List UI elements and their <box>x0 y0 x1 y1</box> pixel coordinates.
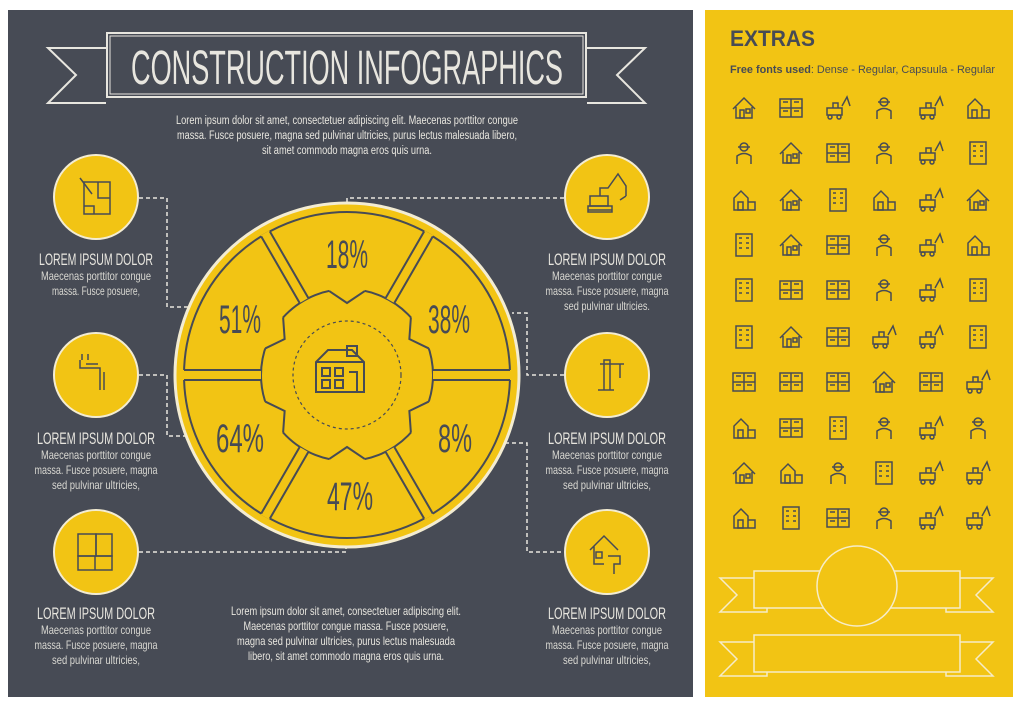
title banner <box>48 33 645 103</box>
labels: sed pulvinar ultricies, <box>52 653 140 667</box>
intro text: massa. Fusce posuere, magna sed pulvinar ultricies, purus lectus malesuada libero, <box>177 130 517 142</box>
bottom text: Maecenas porttitor congue massa. Fusce posuere, <box>244 619 448 633</box>
icon: house painting <box>590 536 620 574</box>
labels: massa. Fusce posuere, magna <box>546 284 669 298</box>
labels: Maecenas porttitor congue <box>41 623 151 637</box>
pie chart: 47% <box>327 475 373 519</box>
labels: LOREM IPSUM DOLOR <box>548 429 666 448</box>
extras heading: EXTRAS <box>730 26 815 51</box>
circle icons <box>54 155 649 594</box>
fonts note: Free fonts used: Dense - Regular, Capsuula - Regular <box>730 64 995 76</box>
bottom text: magna sed pulvinar ultricies, purus lectus malesuada <box>237 634 455 648</box>
icon: crane <box>598 360 624 390</box>
panel: extras yellow <box>705 10 1013 697</box>
icon: kitchen <box>78 534 112 570</box>
labels: Maecenas porttitor congue <box>552 269 662 283</box>
labels: Maecenas porttitor congue <box>41 448 151 462</box>
bottom text <box>231 604 461 663</box>
pie chart: 51% <box>219 298 261 342</box>
ribbon plain <box>720 635 993 676</box>
labels: LOREM IPSUM DOLOR <box>37 429 155 448</box>
title banner: CONSTRUCTION INFOGRAPHICS <box>131 42 563 95</box>
labels: Maecenas porttitor congue <box>552 623 662 637</box>
labels: sed pulvinar ultricies, <box>563 653 651 667</box>
labels: LOREM IPSUM DOLOR <box>37 604 155 623</box>
labels: massa. Fusce posuere, magna <box>34 638 158 652</box>
intro text: Lorem ipsum dolor sit amet, consectetuer adipiscing elit. Maecenas porttitor congue <box>176 115 518 127</box>
labels: massa. Fusce posuere, <box>52 284 140 298</box>
pie chart: 38% <box>428 298 470 342</box>
labels <box>34 250 669 667</box>
panel: main dark <box>8 10 693 697</box>
bottom text: Lorem ipsum dolor sit amet, consectetuer adipiscing elit. <box>231 604 461 618</box>
intro text <box>176 115 518 157</box>
labels: massa. Fusce posuere, magna <box>546 463 669 477</box>
icon: pipe <box>80 354 104 390</box>
labels: LOREM IPSUM DOLOR <box>548 604 666 623</box>
pie chart: 18% <box>326 233 368 277</box>
labels: sed pulvinar ultricies, <box>52 478 140 492</box>
pie chart <box>175 203 519 547</box>
connectors <box>139 198 564 552</box>
labels: LOREM IPSUM DOLOR <box>39 250 153 269</box>
labels: massa. Fusce posuere, magna <box>546 638 669 652</box>
labels: sed pulvinar ultricies. <box>564 299 650 313</box>
labels: Maecenas porttitor congue <box>552 448 662 462</box>
icon: house <box>316 346 364 392</box>
labels: sed pulvinar ultricies, <box>563 478 651 492</box>
intro text: sit amet commodo magna eros quis urna. <box>262 145 432 157</box>
icon grid <box>733 97 990 529</box>
pie chart: 8% <box>438 417 472 461</box>
icon: excavator <box>588 174 626 212</box>
icon: blueprint <box>80 178 110 214</box>
bottom text: libero, sit amet commodo magna eros quis urna. <box>248 649 444 663</box>
labels: LOREM IPSUM DOLOR <box>548 250 666 269</box>
ribbon badge <box>720 546 993 626</box>
pie chart: 64% <box>216 417 264 461</box>
labels: massa. Fusce posuere, magna <box>34 463 158 477</box>
labels: Maecenas porttitor congue <box>41 269 151 283</box>
